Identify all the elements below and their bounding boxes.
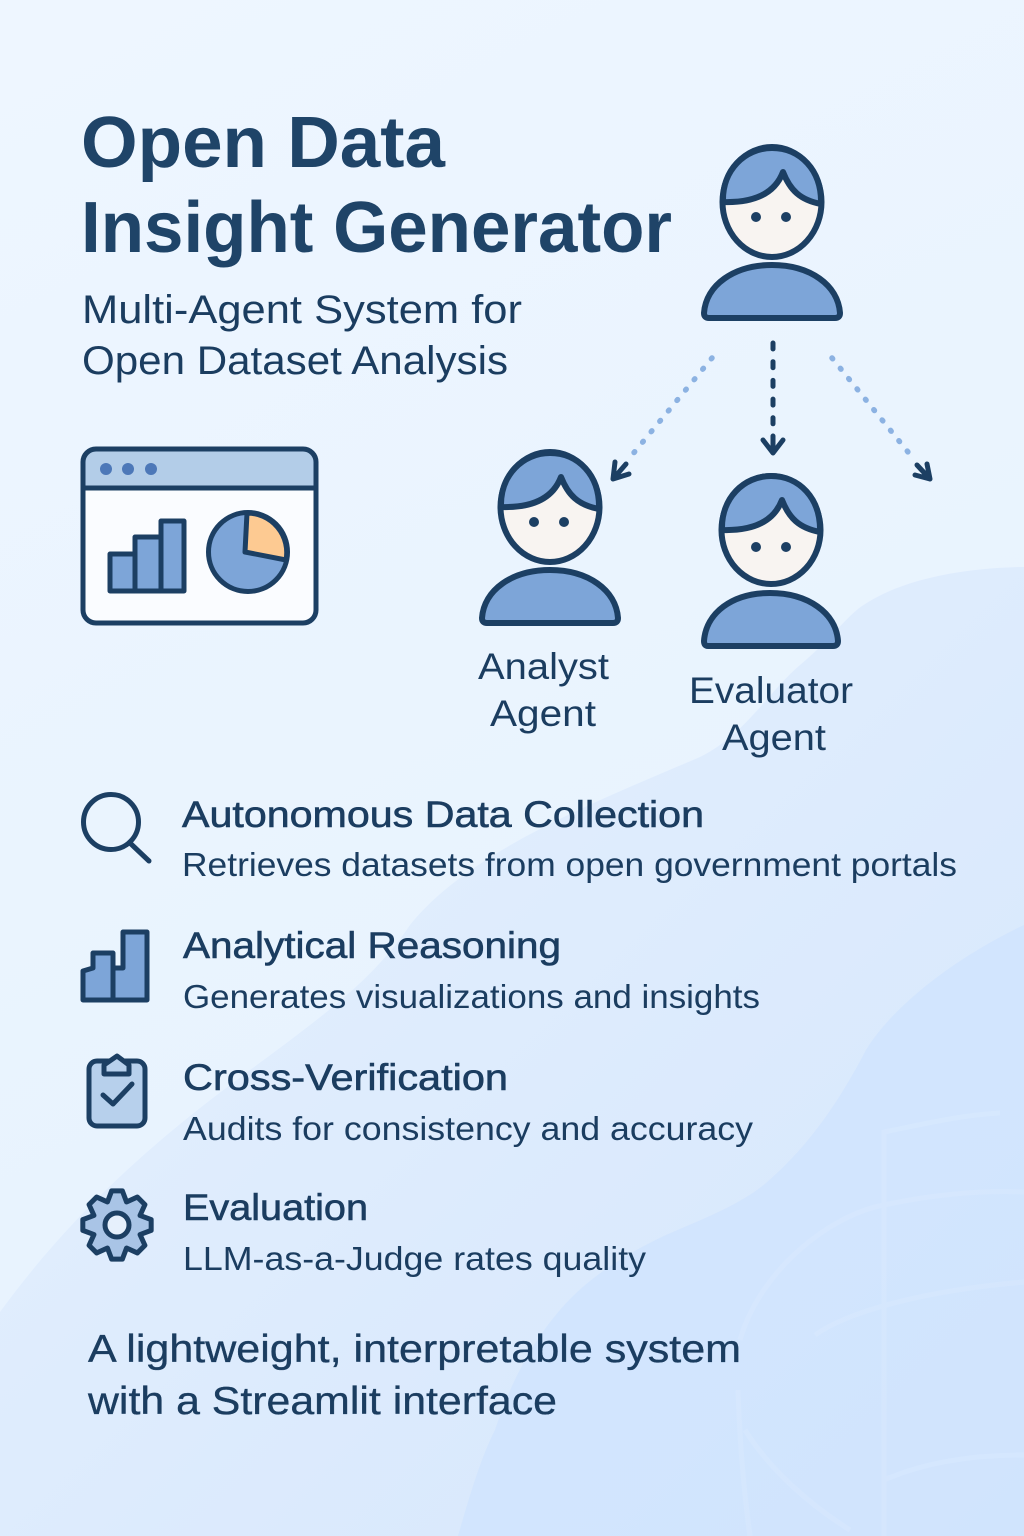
icon: evaluator agent bbox=[704, 476, 838, 646]
feature: cross-verification bbox=[183, 1057, 754, 1147]
pie chart bbox=[208, 512, 288, 592]
feature: evaluation bbox=[183, 1187, 647, 1277]
arrow: to evaluator agent bbox=[763, 343, 783, 453]
title: Open Data bbox=[81, 103, 446, 183]
icon: dashboard window bbox=[83, 449, 316, 623]
label: evaluator agent: Evaluator bbox=[689, 670, 853, 711]
label: evaluator agent bbox=[689, 670, 853, 758]
closing statement: with a Streamlit interface bbox=[87, 1380, 557, 1423]
label: analyst agent: Agent bbox=[490, 693, 597, 734]
title: Insight Generator bbox=[81, 188, 672, 268]
feature: analytical reasoning: Analytical Reasoning bbox=[183, 925, 561, 966]
feature: evaluation: LLM-as-a-Judge rates quality bbox=[183, 1240, 647, 1277]
feature: cross-verification: Cross-Verification bbox=[183, 1057, 508, 1098]
feature: cross-verification: Audits for consistency and accuracy bbox=[183, 1110, 754, 1147]
feature: evaluation: Evaluation bbox=[183, 1187, 368, 1228]
feature: autonomous data collection bbox=[182, 794, 957, 883]
icon: orchestrator agent bbox=[704, 147, 840, 318]
icon: clipboard bbox=[89, 1056, 145, 1126]
arrow: to third agent bbox=[832, 358, 930, 479]
title bbox=[81, 103, 672, 268]
subtitle: Multi-Agent System for bbox=[82, 288, 522, 332]
closing statement bbox=[87, 1328, 741, 1423]
icon: gear bbox=[83, 1191, 151, 1259]
label: analyst agent bbox=[478, 646, 610, 734]
feature: analytical reasoning: Generates visualizations and insights bbox=[183, 978, 760, 1015]
label: analyst agent: Analyst bbox=[478, 646, 610, 687]
label: evaluator agent: Agent bbox=[722, 717, 827, 758]
arrow: to analyst agent bbox=[613, 358, 712, 479]
icon: magnifier bbox=[84, 794, 149, 861]
bar chart bbox=[110, 521, 184, 591]
feature: autonomous data collection: Autonomous Data Collection bbox=[182, 794, 704, 835]
subtitle: Open Dataset Analysis bbox=[82, 339, 508, 383]
feature: autonomous data collection: Retrieves datasets from open government portals bbox=[182, 846, 957, 883]
closing statement: A lightweight, interpretable system bbox=[88, 1328, 741, 1371]
icon: analyst agent bbox=[482, 452, 618, 623]
subtitle bbox=[82, 288, 522, 383]
feature: analytical reasoning bbox=[183, 925, 760, 1015]
icon: rising bars bbox=[83, 932, 147, 1000]
